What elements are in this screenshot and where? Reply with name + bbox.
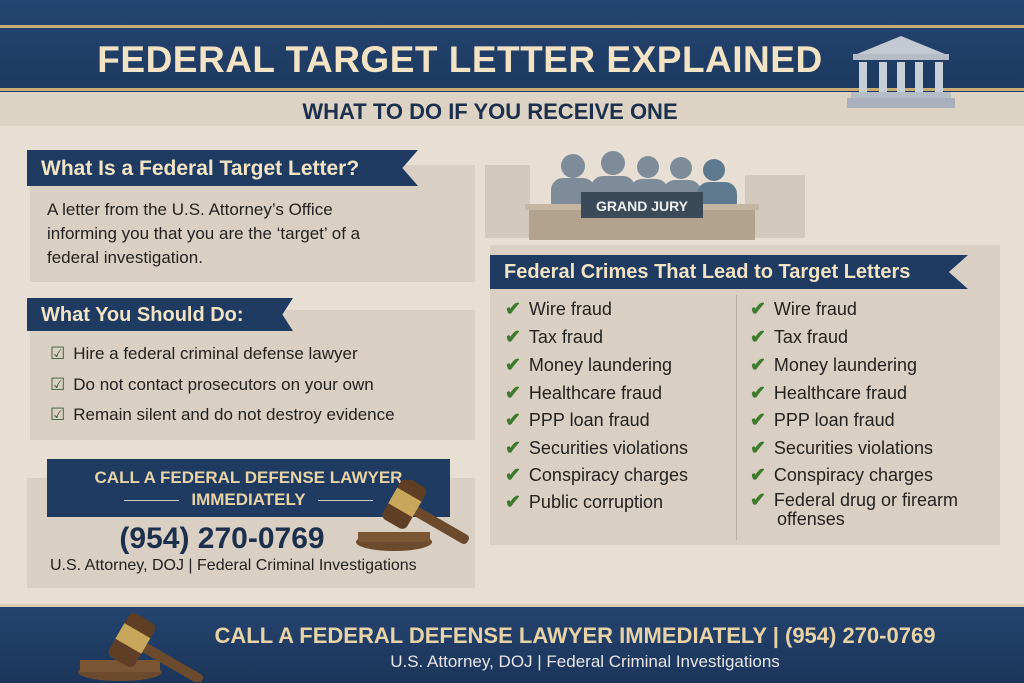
heading: crimes: Federal Crimes That Lead to Target Letters <box>504 261 910 283</box>
list: crimes right: ✔ PPP loan fraud <box>750 410 895 431</box>
panel: what you should do <box>30 310 475 440</box>
panel: what is a target letter <box>30 165 475 282</box>
definition text: A letter from the U.S. Attorney’s Office informing you that you are the ‘target’ of a federal investigation. <box>47 200 360 267</box>
phone: (954) 270-0769 <box>119 522 325 555</box>
heading: what is <box>27 150 418 186</box>
heading: what is: What Is a Federal Target Letter? <box>41 157 359 180</box>
illustration: grand jury <box>485 151 805 240</box>
header band <box>0 0 1024 92</box>
checklist: ☑ Do not contact prosecutors on your own <box>50 375 374 394</box>
list: crimes left: ✔ Tax fraud <box>505 327 603 348</box>
list: crimes right: ✔ Securities violations <box>750 438 933 459</box>
heading: what you should do: What You Should Do: <box>41 304 244 326</box>
list: crimes right: ✔ Healthcare fraud <box>750 383 907 404</box>
list: crimes right: offenses <box>777 509 845 529</box>
cta banner: CALL A FEDERAL DEFENSE LAWYER <box>95 468 402 487</box>
list: crimes left: ✔ Healthcare fraud <box>505 383 662 404</box>
list: crimes left: ✔ Money laundering <box>505 355 672 376</box>
list: crimes left: ✔ Public corruption <box>505 492 663 513</box>
icon: footer gavel <box>78 613 203 682</box>
cta banner: IMMEDIATELY <box>191 490 306 509</box>
checklist <box>50 344 395 424</box>
sub text: U.S. Attorney, DOJ | Federal Criminal Investigations <box>50 557 417 574</box>
panel: call to action <box>27 478 475 588</box>
panel: crimes <box>490 245 1000 545</box>
footer line 1: CALL A FEDERAL DEFENSE LAWYER IMMEDIATELY | (954) 270-0769 <box>215 623 935 648</box>
list: crimes right: ✔ Money laundering <box>750 355 917 376</box>
illustration: grand jury: GRAND JURY <box>596 198 689 214</box>
subtitle: WHAT TO DO IF YOU RECEIVE ONE <box>302 99 678 124</box>
list: crimes right <box>750 299 958 529</box>
list: crimes left: ✔ Wire fraud <box>505 299 612 320</box>
heading: crimes <box>490 255 968 289</box>
checklist: ☑ Hire a federal criminal defense lawyer <box>50 344 358 363</box>
list: crimes right: ✔ Wire fraud <box>750 299 857 320</box>
footer band <box>0 604 1024 683</box>
icon: courthouse <box>847 36 955 108</box>
list: crimes left: ✔ Conspiracy charges <box>505 465 688 486</box>
subtitle strip <box>0 92 1024 126</box>
icon: gavel <box>356 480 469 551</box>
cta banner <box>47 459 450 517</box>
list: crimes left: ✔ Securities violations <box>505 438 688 459</box>
footer line 2: U.S. Attorney, DOJ | Federal Criminal Investigations <box>390 652 780 671</box>
title: FEDERAL TARGET LETTER EXPLAINED <box>97 39 823 80</box>
checklist: ☑ Remain silent and do not destroy evidence <box>50 405 395 424</box>
list: crimes right: ✔ Federal drug or firearm <box>750 490 958 511</box>
list: crimes left: ✔ PPP loan fraud <box>505 410 650 431</box>
list: crimes right: ✔ Conspiracy charges <box>750 465 933 486</box>
heading: what you should do <box>27 298 293 331</box>
list: crimes right: ✔ Tax fraud <box>750 327 848 348</box>
list: crimes left <box>505 299 688 513</box>
